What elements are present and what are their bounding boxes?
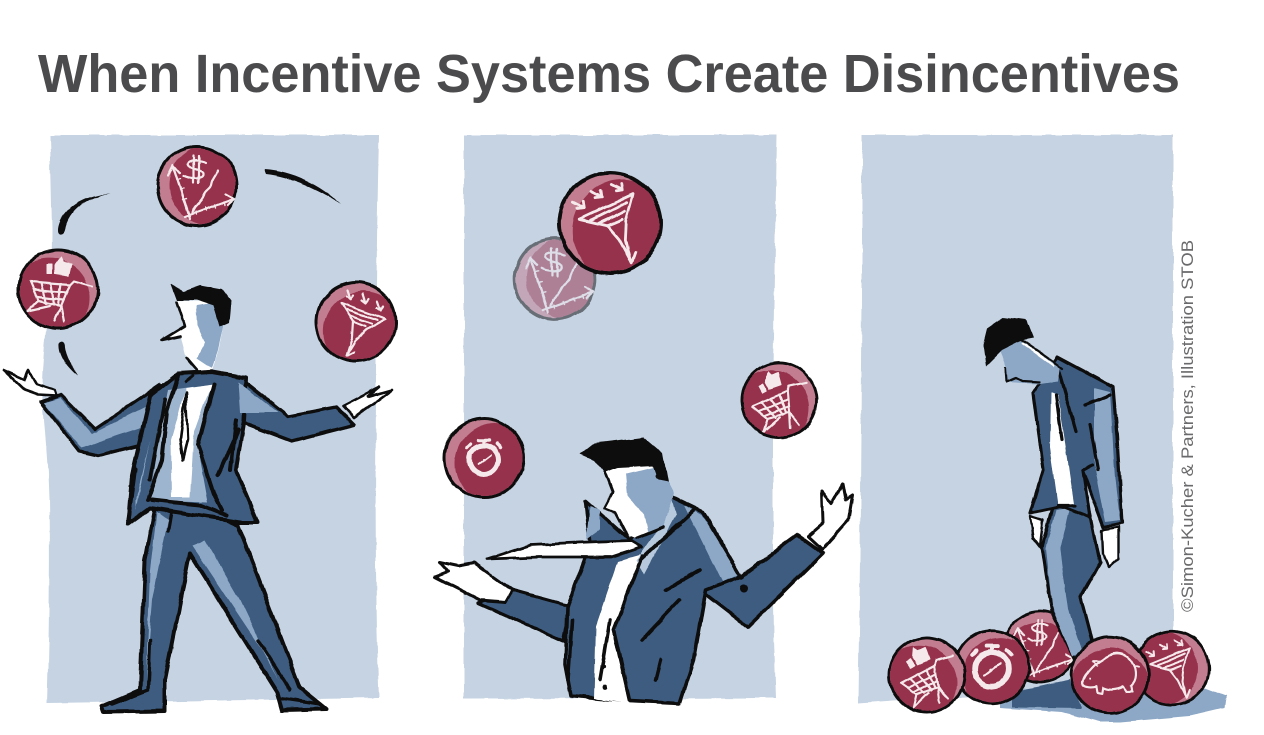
trouser ink lines [112,508,320,704]
ball: stopwatch [942,618,1050,723]
face ink lines [605,472,664,538]
ball: stopwatch [443,417,535,503]
jacket highlights [136,382,278,510]
jacket ink lines [568,510,700,700]
jacket ink lines [1056,368,1110,505]
jacket highlights [586,505,738,582]
jacket ink lines [128,376,238,520]
panel: dropped balls [858,135,1226,735]
right arm [236,378,354,441]
man off balance [435,437,852,703]
jacket [565,495,740,703]
trouser highlight [1046,508,1082,656]
left hand [4,370,56,396]
far arm [700,512,823,627]
ball: funnel [553,166,680,286]
panel: juggling confidently [0,125,420,712]
hair [983,317,1033,366]
left arm [41,385,170,456]
panel: losing control [435,135,852,703]
trousers [1042,505,1100,660]
ball: shopping cart [0,235,111,351]
near hand [435,562,512,602]
jacket [1030,357,1122,527]
hair [580,437,668,482]
buttons [602,584,748,689]
right hand [1102,527,1118,567]
near arm [478,589,570,641]
ball: shopping cart [870,624,977,734]
credit line: ©Simon-Kucher & Partners, Illustration STOB [1178,240,1197,612]
shirt collar shade [636,500,676,575]
head [605,466,674,538]
right hand [343,387,393,418]
title: When Incentive Systems Create Disincentives [38,44,1180,104]
ball: funnel [1111,614,1223,723]
panel background [42,135,379,703]
head [1000,340,1060,384]
trousers [102,506,326,712]
head [161,300,224,372]
left hand [1030,516,1043,547]
faded ball: revenue chart [498,217,623,340]
necktie [180,376,193,460]
face ink line [1006,340,1062,382]
panel background [858,135,1173,703]
dark shadow below chart ball [1012,680,1082,708]
face shading [626,466,674,534]
jacket [128,372,258,524]
trouser highlights [146,512,278,680]
sleeve highlight [1094,388,1120,522]
hair [171,284,231,326]
drooping man [983,317,1122,660]
chest light shade [150,384,215,502]
left sleeve highlight [44,398,150,448]
floor shadow [1000,680,1226,722]
shirt strip [594,554,642,703]
ball: piggy bank [1054,622,1167,735]
shirt [171,384,213,497]
far hand [808,484,852,549]
man juggling [4,284,393,712]
panel background [464,135,777,699]
ball: funnel [300,268,420,384]
neck highlight [1022,343,1054,366]
earring [655,473,661,479]
shirt [1050,392,1074,505]
face shading [196,303,224,368]
juggling motion arcs [58,169,341,376]
ball: shopping cart [722,349,829,459]
face ink lines [162,302,212,372]
ball: revenue chart [141,125,264,245]
ball: revenue chart [988,598,1093,706]
flying necktie [487,541,642,559]
